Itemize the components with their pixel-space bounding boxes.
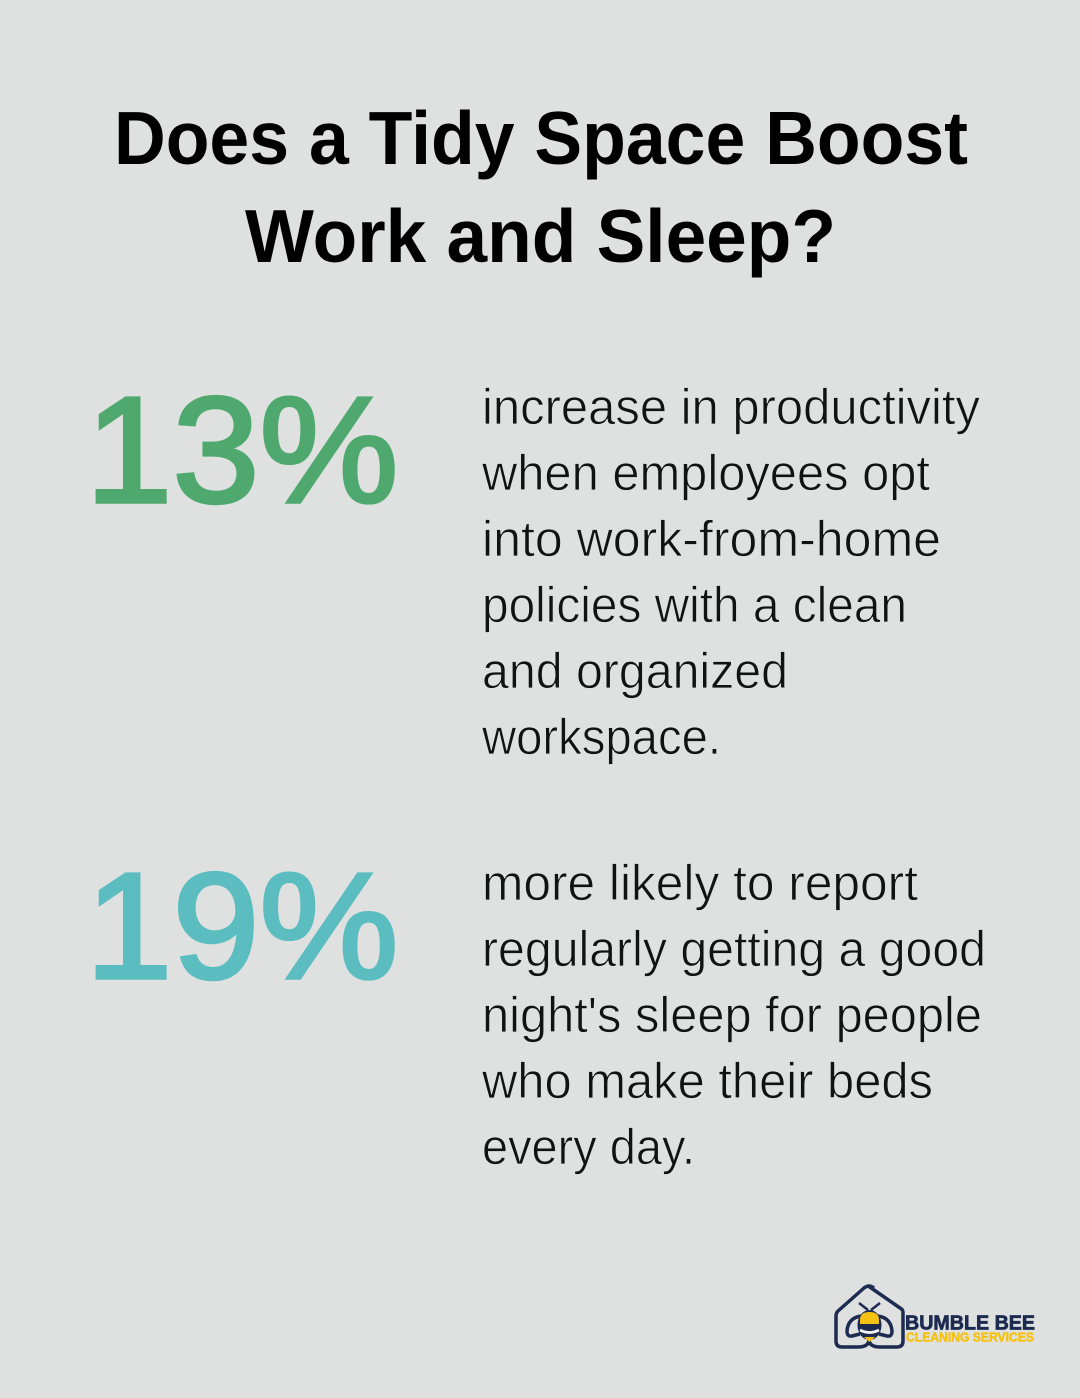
text: sleep description: every day. [482, 1119, 695, 1175]
title: Does a Tidy Space Boost [114, 96, 968, 180]
logo: Bumble Bee Cleaning Services [836, 1286, 1035, 1347]
text: productivity description [481, 379, 980, 765]
text: sleep description: more likely to report [482, 855, 918, 911]
text: sleep description: night's sleep for people [482, 987, 982, 1043]
text: productivity description: increase in productivity [482, 379, 980, 435]
text: productivity description: workspace. [481, 709, 721, 765]
title: Work and Sleep? [245, 194, 836, 278]
text: sleep description [481, 855, 986, 1175]
stat: 13%: 13% [86, 365, 398, 534]
logo wordmark: BUMBLE BEE [905, 1312, 1035, 1334]
text: productivity description: when employees opt [481, 445, 930, 501]
stat: 19%: 19% [86, 841, 398, 1010]
text: sleep description: regularly getting a good [482, 921, 986, 977]
icon: house with bee [836, 1286, 903, 1347]
text: sleep description: who make their beds [481, 1053, 933, 1109]
text: productivity description: and organized [482, 643, 788, 699]
title [114, 96, 968, 278]
logo tagline: CLEANING SERVICES [906, 1330, 1034, 1344]
text: productivity description: policies with a clean [482, 577, 907, 633]
text: productivity description: into work-from-home [482, 511, 941, 567]
